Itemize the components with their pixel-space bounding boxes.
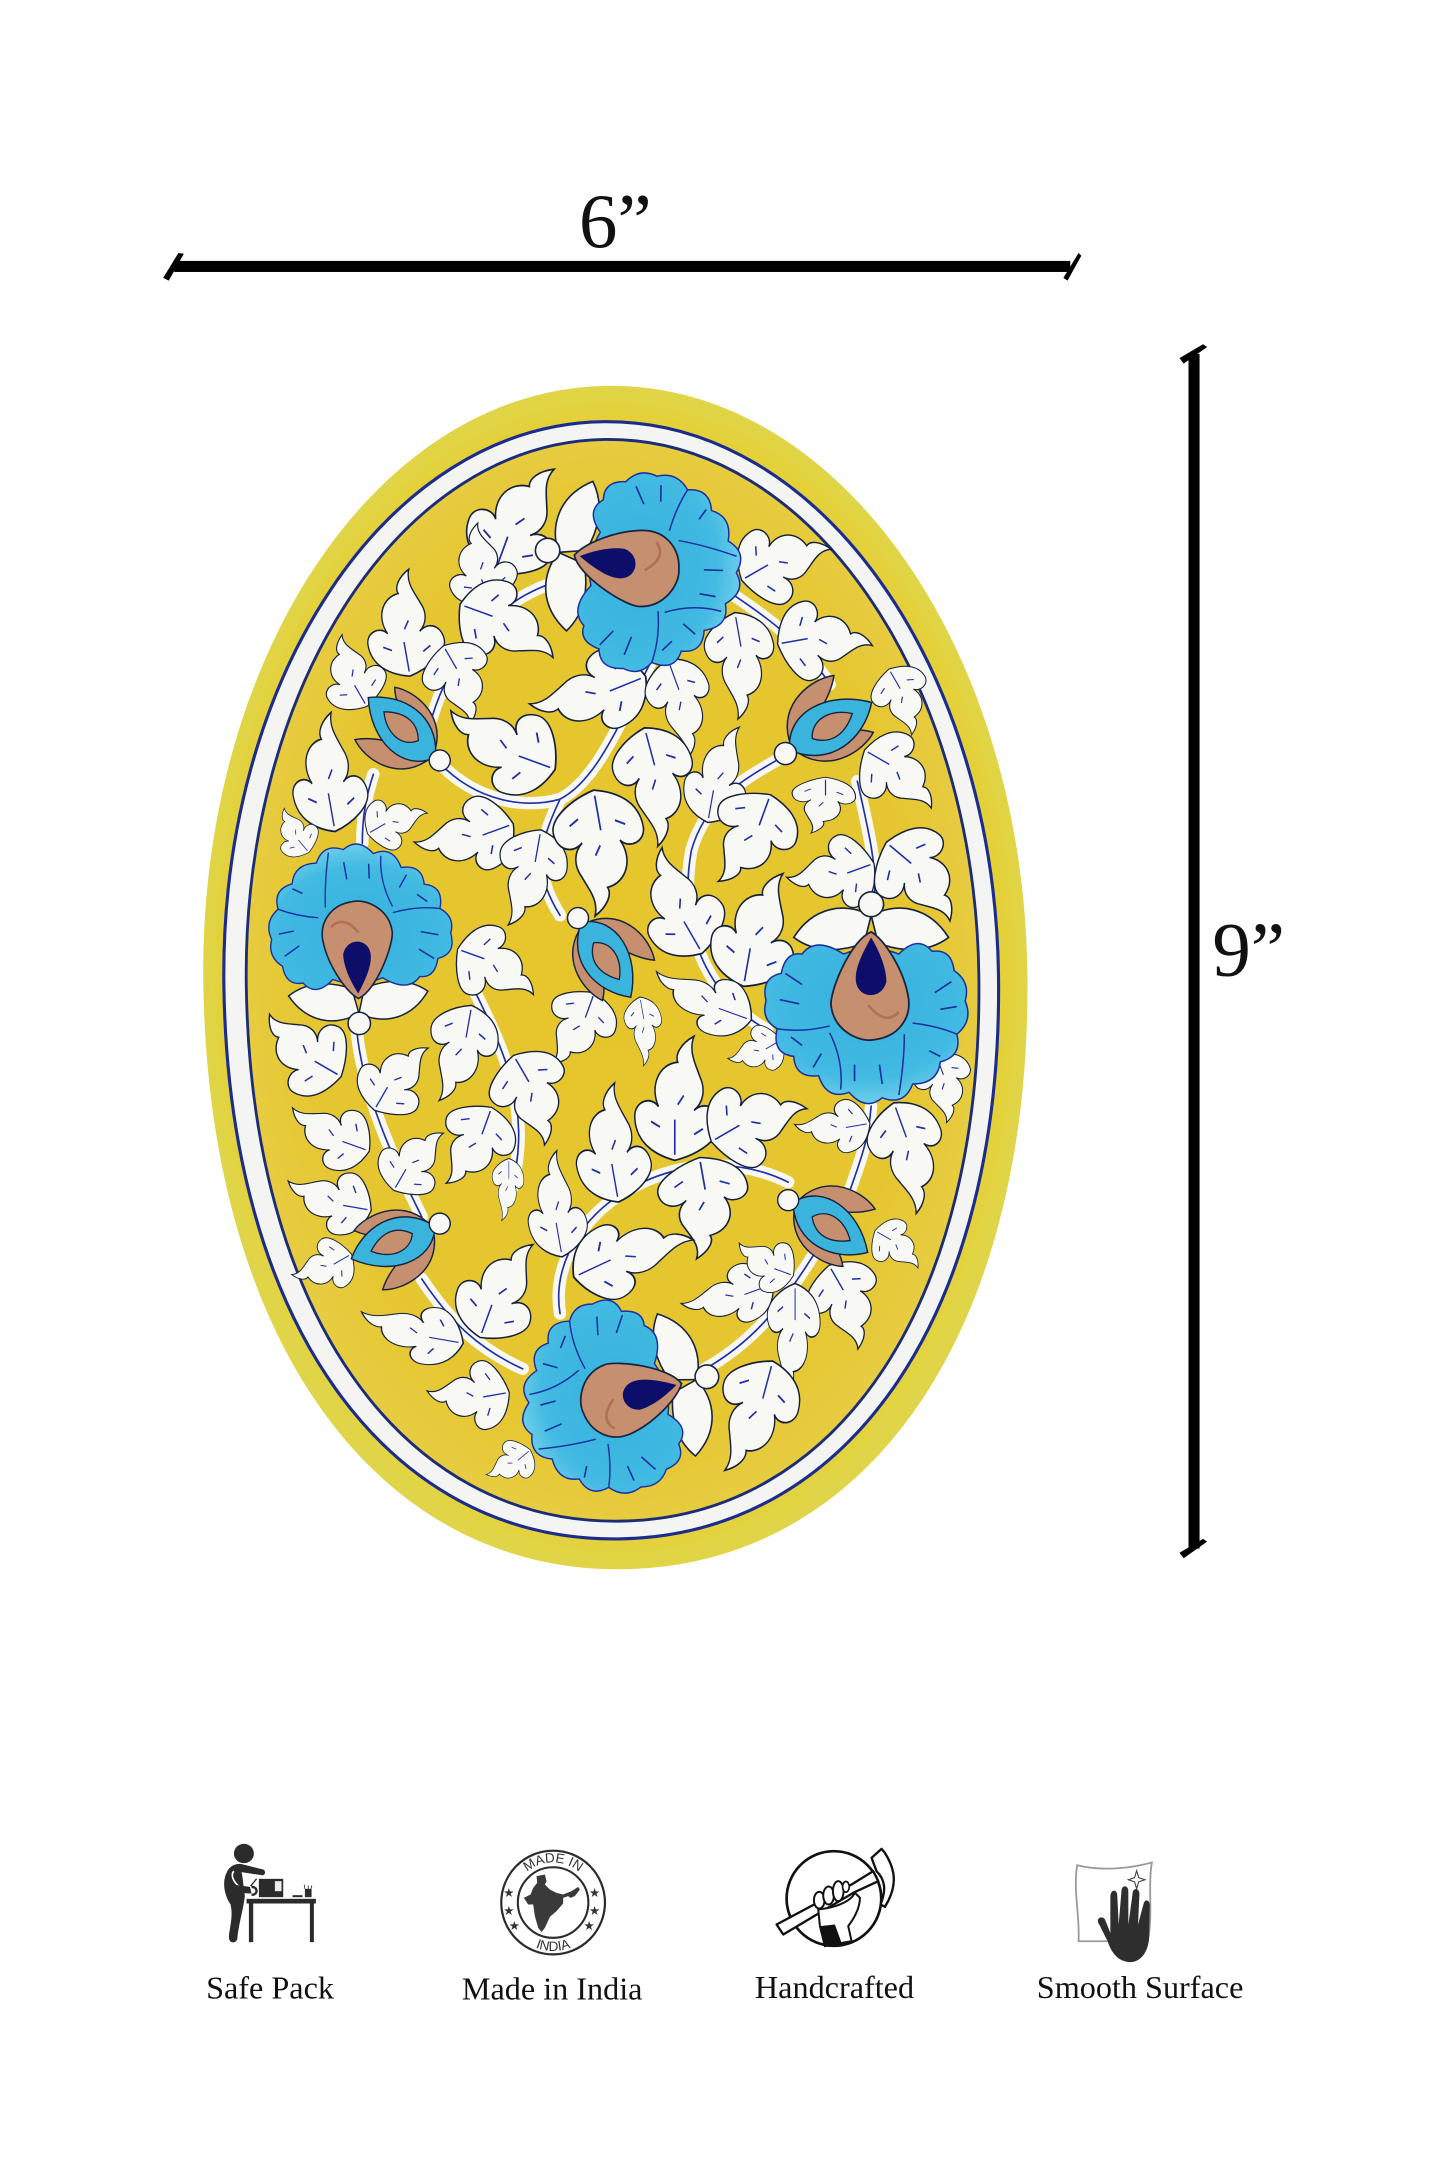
flower bud: upper right	[753, 662, 889, 793]
feature: handcrafted	[755, 1849, 914, 2005]
yellow field	[239, 434, 986, 1526]
label: Smooth Surface	[1037, 1969, 1243, 2005]
flower bud: upper left	[341, 675, 470, 797]
flower: right	[765, 892, 968, 1104]
flower: top	[517, 455, 756, 687]
icon: made in india seal: ★	[589, 1904, 600, 1918]
flower bud: lower left	[338, 1185, 467, 1301]
label: Handcrafted	[755, 1969, 914, 2005]
feature: safe pack	[206, 1844, 335, 2005]
width dimension line: 6 inches	[163, 253, 1081, 281]
icon: made in india seal: ★	[503, 1886, 514, 1900]
oval plate	[195, 380, 1036, 1575]
flower bud: lower right	[761, 1162, 890, 1277]
white leaves	[242, 448, 988, 1497]
icon: made in india seal: MADE IN	[522, 1853, 584, 1872]
height label: 9”	[1212, 907, 1285, 992]
plate rim	[195, 380, 1036, 1575]
icon: made in india seal: ★	[583, 1919, 595, 1933]
width label: 6”	[579, 179, 652, 264]
height dimension line: 9 inches	[1180, 344, 1207, 1558]
flower: bottom	[498, 1276, 742, 1515]
white border band	[216, 416, 1006, 1544]
flower bud: center	[542, 886, 668, 1015]
icon: made in india seal: ★	[509, 1919, 520, 1933]
feature: made in india	[462, 1850, 642, 2006]
icon: made in india seal: ★	[589, 1886, 600, 1900]
flower: left	[266, 841, 455, 1038]
label: Made in India	[462, 1970, 642, 2006]
icon: fist holding hammer in circle	[777, 1849, 894, 1946]
icon: hand wiping cloth	[1076, 1862, 1152, 1962]
icon: made in india seal: INDIA	[536, 1939, 571, 1951]
stems	[357, 581, 875, 1369]
label: Safe Pack	[206, 1969, 335, 2005]
icon: person packing at table	[224, 1844, 316, 1942]
icon: made in india seal	[500, 1850, 606, 1956]
icon: made in india seal: ★	[503, 1904, 514, 1918]
feature: smooth surface	[1037, 1862, 1243, 2005]
